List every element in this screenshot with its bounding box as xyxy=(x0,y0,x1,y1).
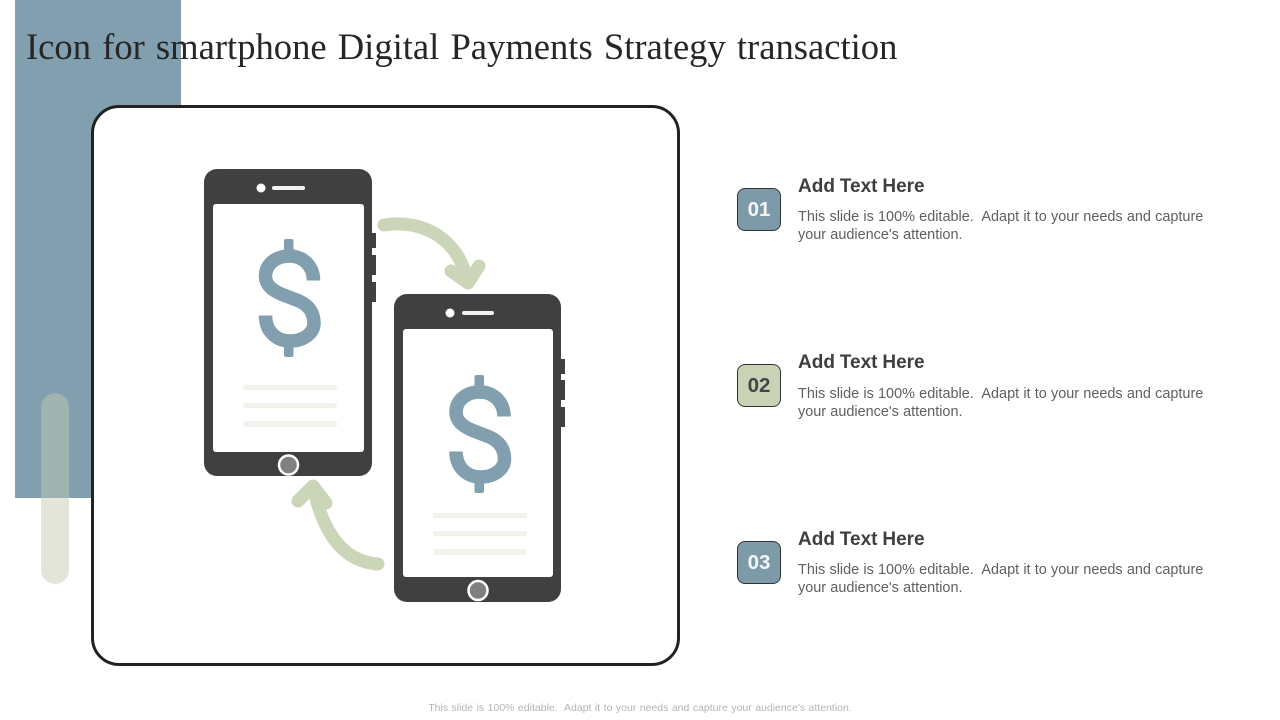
decorative pill xyxy=(41,393,69,584)
badge 02 xyxy=(737,364,781,407)
description 02: your audience's attention. xyxy=(798,404,962,420)
heading 03: Add Text Here xyxy=(798,529,925,550)
text block 01 xyxy=(798,176,1203,243)
description 03 xyxy=(798,562,1203,596)
phone: right receiver xyxy=(394,294,565,602)
badge 01 xyxy=(737,188,781,231)
description 02: This slide is 100% editable. Adapt it to your needs and capture xyxy=(798,386,1203,402)
badge 03 xyxy=(737,541,781,584)
decorative panel: blue-grey backdrop xyxy=(15,0,181,498)
heading 01: Add Text Here xyxy=(798,176,925,197)
description 03: your audience's attention. xyxy=(798,580,962,596)
panel: illustration card xyxy=(91,105,680,666)
title: Icon for smartphone Digital Payments Strategy transaction xyxy=(26,26,897,67)
heading 02: Add Text Here xyxy=(798,352,925,373)
text block 03 xyxy=(798,529,1203,596)
phone: left sender xyxy=(204,169,376,476)
description 02 xyxy=(798,386,1203,420)
text block 02 xyxy=(798,352,1203,420)
description 01: This slide is 100% editable. Adapt it to your needs and capture xyxy=(798,209,1203,225)
description 03: This slide is 100% editable. Adapt it to your needs and capture xyxy=(798,562,1203,578)
badge 03: 03 xyxy=(748,551,770,574)
footer note: This slide is 100% editable. Adapt it to your needs and capture your audience's attention. xyxy=(428,702,852,714)
arrow: left phone to right phone xyxy=(384,224,479,283)
description 01: your audience's attention. xyxy=(798,227,962,243)
badge 01: 01 xyxy=(748,198,770,221)
badge 02: 02 xyxy=(748,374,770,397)
arrow: right phone to left phone xyxy=(298,486,378,564)
description 01 xyxy=(798,209,1203,243)
